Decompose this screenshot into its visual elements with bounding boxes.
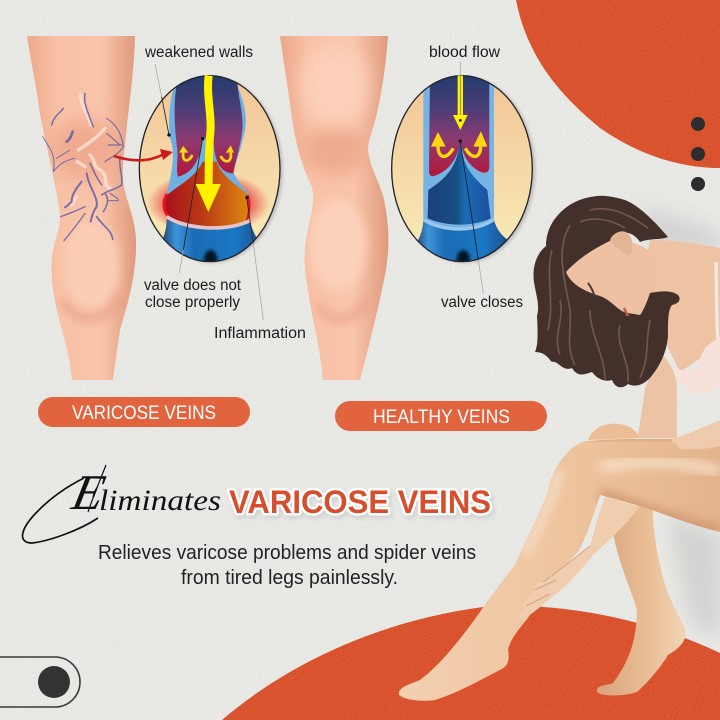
leader line: [460, 62, 483, 293]
upper lumen: [175, 73, 243, 177]
labels: diagrams: close properly: [145, 294, 240, 311]
hand on thigh: [672, 420, 720, 449]
labels: diagrams: Inflammation: [214, 325, 306, 342]
torso and neck: [640, 240, 720, 372]
return arrows: [438, 147, 481, 156]
decorative circle: top right: [516, 0, 720, 168]
vein wall: [423, 73, 494, 230]
front thigh and lower leg: [399, 438, 720, 701]
diagram: healthy vein cross-section: [392, 62, 535, 293]
lower chamber: [165, 162, 248, 226]
ear: [610, 231, 632, 256]
reflux arrows: [183, 153, 231, 161]
supporting arm: [638, 352, 677, 438]
flared base: [163, 218, 256, 261]
heading: varicose veins: VARICOSE VEINS: [229, 484, 491, 520]
heading: varicose veins: VARICOSE VEINS: [229, 484, 491, 520]
hair: [534, 196, 680, 387]
diagram: varicose vein cross-section: [139, 64, 283, 320]
labels: diagrams: blood flow: [429, 44, 501, 61]
subheading text: from tired legs painlessly.: [181, 567, 398, 589]
badge: varicose veins: VARICOSE VEINS: [72, 403, 216, 424]
arrow: knee to diagram: [114, 149, 173, 160]
heading: script word: E: [67, 464, 110, 520]
dots: top right: [691, 117, 705, 191]
vein wall: [167, 76, 250, 195]
closed valve: [428, 142, 491, 225]
flared base: [418, 220, 507, 261]
photo: seated woman: [399, 196, 720, 701]
eye and lips: [588, 283, 628, 316]
labels: diagrams: weakened walls: [144, 44, 253, 61]
heading: script word: liminates: [99, 484, 221, 517]
back leg: [597, 505, 686, 695]
badge: healthy veins: [335, 401, 547, 431]
decorative circle: bottom: [222, 606, 720, 720]
illustration: varicose leg: [27, 36, 136, 380]
flow arrow: [453, 76, 468, 130]
illustration: healthy leg: [280, 36, 388, 380]
heading: varicose veins: VARICOSE VEINS: [231, 487, 493, 523]
veins: [43, 93, 123, 241]
forearm and hand on shin: [519, 497, 640, 620]
subheading text: Relieves varicose problems and spider veins: [98, 542, 476, 564]
face: [566, 240, 661, 316]
labels: diagrams: valve does not: [144, 277, 242, 294]
heading: script word: [23, 464, 221, 543]
labels: diagrams: [144, 44, 523, 342]
leader lines: [155, 64, 263, 320]
labels: diagrams: valve closes: [441, 294, 523, 311]
wall shadow: [640, 205, 720, 640]
toggle icon: bottom left: [0, 657, 80, 707]
back knee: [588, 424, 640, 440]
badge: healthy veins: HEALTHY VEINS: [373, 407, 510, 428]
badge: varicose veins: [38, 397, 250, 427]
subheading text: [98, 542, 476, 589]
bra: [673, 338, 720, 394]
flow arrow: [196, 76, 221, 212]
upper lumen: [429, 73, 489, 176]
